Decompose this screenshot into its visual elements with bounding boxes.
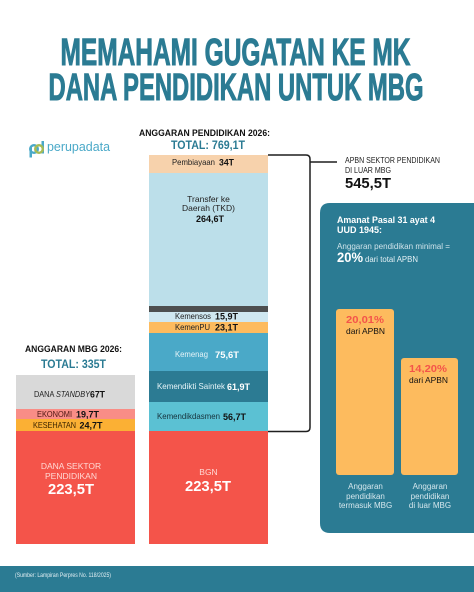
bar label: di luar MBG: di luar MBG — [409, 501, 451, 510]
source note: (Sumber: Lampiran Perpres No. 118/2025) — [15, 573, 111, 579]
segment: kesehatan: 24,7T — [80, 420, 103, 430]
segment: kemendikti saintek — [149, 371, 268, 402]
bar: 14,20% — [401, 358, 458, 475]
segment: ekonomi: EKONOMI — [37, 410, 72, 419]
bar: 20,01% — [336, 309, 394, 475]
segment: kemensos — [149, 311, 268, 322]
bar: 14,20%: 14,20% — [409, 363, 448, 375]
bar label: termasuk MBG: Anggaran — [348, 482, 383, 491]
bar label: termasuk MBG — [339, 482, 392, 510]
segment: dana sektor pendidikan: PENDIDIKAN — [45, 471, 97, 481]
segment: pembiayaan: Pembiayaan — [172, 157, 215, 167]
segment: ekonomi — [16, 409, 135, 420]
segment: transfer ke daerah: 264,6T — [196, 214, 225, 224]
segment: BGN — [149, 431, 268, 544]
segment: dana standby — [16, 375, 135, 409]
bar label: termasuk MBG: pendidikan — [346, 492, 385, 501]
segment: ekonomi: 19,7T — [76, 410, 100, 420]
segment: kemensos: 15,9T — [215, 312, 239, 322]
bar label: di luar MBG — [409, 482, 451, 510]
bar: 20,01%: 20,01% — [346, 314, 385, 326]
segment: kemendikdasmen: 56,7T — [223, 412, 247, 422]
title — [48, 32, 424, 109]
segment: kemendikti saintek: 61,9T — [227, 382, 251, 392]
bar: 20,01%: dari APBN — [346, 326, 385, 336]
segment: BGN: 223,5T — [185, 479, 231, 495]
panel heading: UUD 1945: — [337, 225, 382, 236]
bar label: di luar MBG: pendidikan — [411, 492, 449, 501]
heading: anggaran pendidikan: ANGGARAN PENDIDIKAN 2026: — [139, 128, 270, 138]
segment: kemenag: Kemenag — [175, 349, 208, 359]
segment: pembiayaan — [149, 155, 268, 173]
panel: amanat pasal 31 — [320, 203, 474, 533]
logo: perupadata: perupadata — [47, 139, 111, 154]
panel text: minimum — [337, 241, 450, 265]
footer band — [0, 566, 474, 592]
segment: dana standby: 67T — [90, 390, 105, 400]
segment: dana sektor pendidikan: 223,5T — [48, 482, 94, 498]
segment: kemendikdasmen: Kemendikdasmen — [157, 411, 220, 421]
stacked bar: anggaran MBG — [16, 375, 135, 544]
segment: kemenag: 75,6T — [215, 350, 240, 360]
segment: kemenpu: 23,1T — [215, 322, 239, 332]
heading: anggaran MBG — [25, 344, 122, 371]
segment: kesehatan — [16, 419, 135, 431]
bar label: di luar MBG: Anggaran — [413, 482, 447, 491]
segment: dark divider — [149, 306, 268, 312]
segment: pembiayaan: 34T — [219, 158, 234, 168]
heading: anggaran MBG: ANGGARAN MBG 2026: — [25, 344, 122, 354]
logo: perupadata — [30, 139, 111, 158]
segment: dana standby: DANA STANDBY — [34, 390, 91, 399]
heading: anggaran MBG: TOTAL: 335T — [41, 359, 106, 371]
segment: kemendikti saintek: Kemendikti Saintek — [157, 381, 226, 391]
segment: kesehatan: KESEHATAN — [33, 421, 76, 430]
segment: kemenpu: KemenPU — [175, 322, 210, 332]
heading: anggaran pendidikan: TOTAL: 769,1T — [171, 138, 246, 152]
callout: APBN sektor pendidikan di luar MBG: APBN SEKTOR PENDIDIKAN — [345, 156, 440, 165]
bar label: termasuk MBG: termasuk MBG — [339, 501, 392, 510]
segment: kemenag — [149, 333, 268, 371]
segment: kemenpu — [149, 322, 268, 333]
segment: transfer ke daerah: Daerah (TKD) — [182, 203, 235, 213]
segment: BGN: BGN — [199, 467, 218, 477]
segment: transfer ke daerah: Transfer ke — [187, 194, 230, 204]
callout: APBN sektor pendidikan di luar MBG: DI LUAR MBG — [345, 166, 391, 175]
bracket connector — [268, 155, 337, 432]
segment: dana sektor pendidikan — [16, 431, 135, 544]
segment: dana sektor pendidikan: DANA SEKTOR — [41, 461, 101, 471]
panel heading: Amanat Pasal 31 ayat 4 — [337, 215, 436, 226]
stacked bar: anggaran pendidikan — [149, 155, 268, 544]
panel text: minimum: Anggaran pendidikan minimal = — [337, 241, 450, 251]
bar: 14,20%: dari APBN — [409, 375, 448, 385]
callout: APBN sektor pendidikan di luar MBG: 545,5T — [345, 175, 391, 192]
segment: kemensos: Kemensos — [175, 311, 211, 321]
callout: APBN sektor pendidikan di luar MBG — [345, 156, 440, 192]
segment: kemendikdasmen — [149, 402, 268, 431]
panel heading — [337, 215, 436, 236]
panel text: minimum: dari total APBN — [365, 255, 418, 264]
segment: transfer ke daerah — [149, 173, 268, 306]
panel text: minimum: 20% — [337, 249, 364, 265]
heading: anggaran pendidikan — [139, 128, 270, 152]
